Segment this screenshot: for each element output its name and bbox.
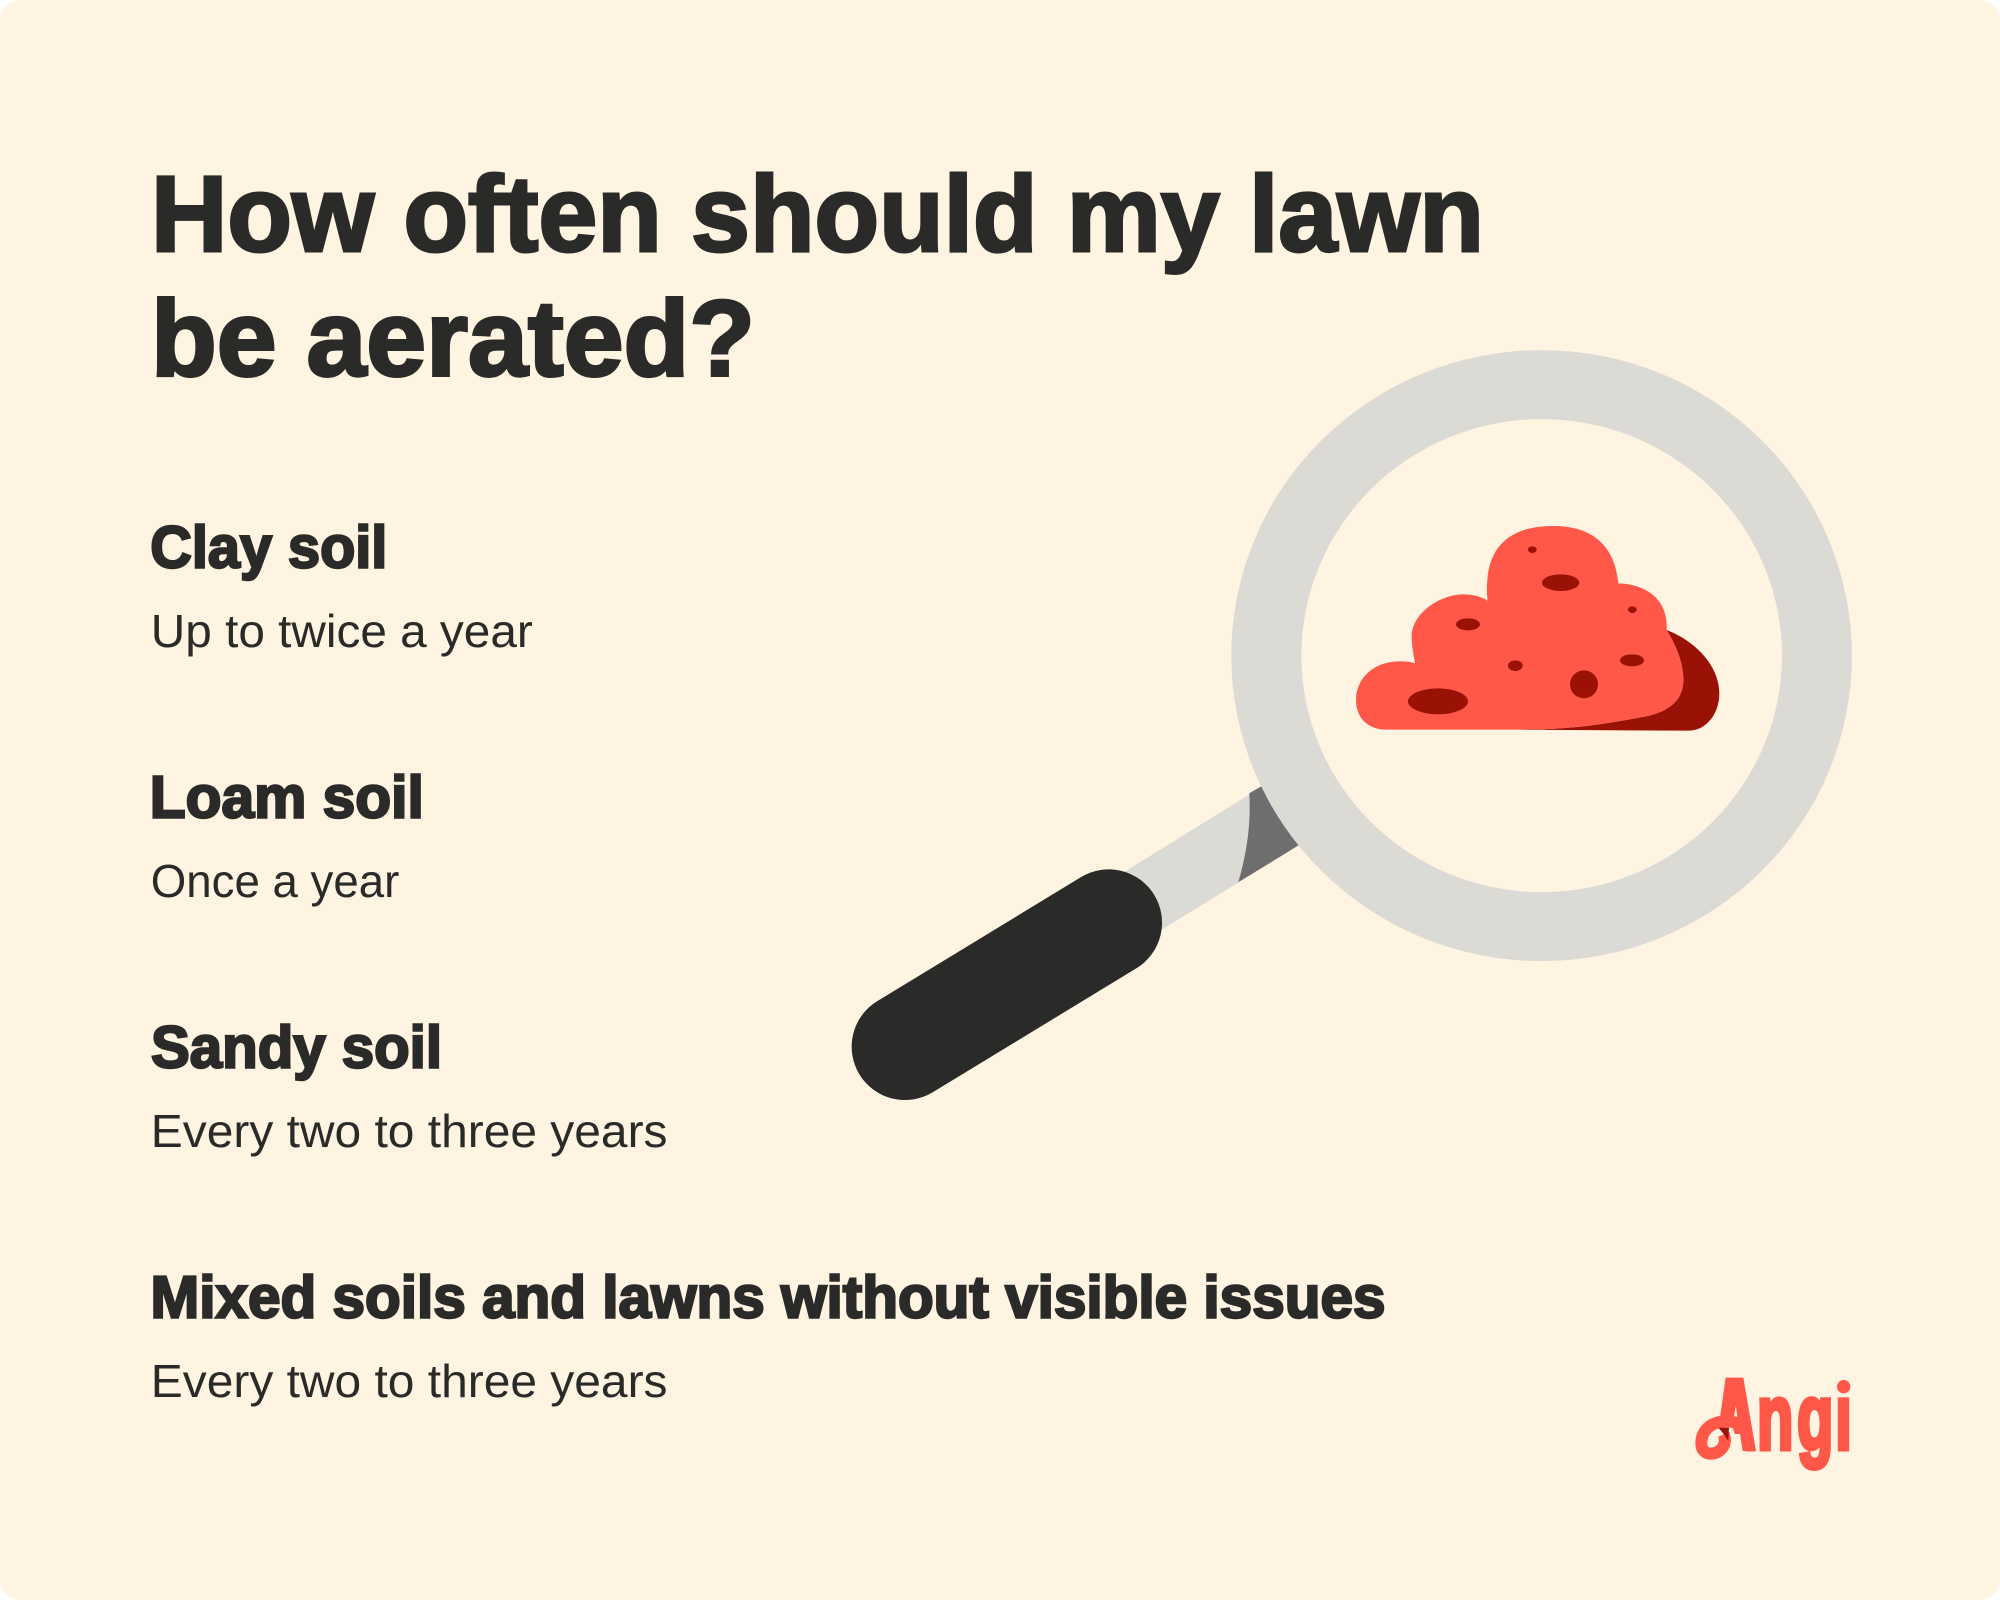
item: loam soil: Once a year — [151, 855, 399, 907]
logo: Angi: A — [1719, 1359, 1755, 1471]
soil clump shadow — [1517, 630, 1719, 731]
logo i dot — [1837, 1380, 1850, 1393]
item: clay soil — [150, 514, 533, 657]
magnifier handle grip — [905, 923, 1109, 1047]
item: mixed soils: Every two to three years — [151, 1355, 668, 1407]
magnifier shaft — [1100, 778, 1312, 945]
item: sandy soil — [151, 1014, 668, 1157]
logo left-foot mask — [1703, 1423, 1741, 1455]
magnifier lens ring — [1231, 350, 1852, 961]
item: sandy soil: Sandy soil — [151, 1014, 442, 1080]
icon: soil clump — [1356, 526, 1719, 731]
soil clump body — [1356, 526, 1683, 730]
logo A diagonal reinforcement — [1720, 1378, 1756, 1451]
logo swash — [1701, 1421, 1740, 1454]
logo: Angi: ngi — [1757, 1364, 1852, 1469]
icon: magnifying glass — [905, 350, 1852, 1047]
item: clay soil: Up to twice a year — [151, 605, 533, 657]
item: sandy soil: Every two to three years — [151, 1105, 668, 1157]
soil clump pores — [1408, 546, 1644, 714]
title — [151, 153, 1484, 398]
title: be aerated? — [151, 278, 755, 398]
item: mixed soils: Mixed soils and lawns without visible issues — [150, 1264, 1386, 1330]
item: clay soil: Clay soil — [150, 514, 387, 580]
item: loam soil — [150, 764, 424, 907]
item: mixed soils — [150, 1264, 1386, 1407]
title: How often should my lawn — [151, 153, 1484, 274]
logo crossing — [1718, 1428, 1729, 1441]
logo: Angi — [1701, 1359, 1855, 1471]
magnifier shaft shadow — [1238, 778, 1312, 882]
logo i dot mask — [1832, 1370, 1855, 1396]
item: loam soil: Loam soil — [150, 764, 424, 830]
